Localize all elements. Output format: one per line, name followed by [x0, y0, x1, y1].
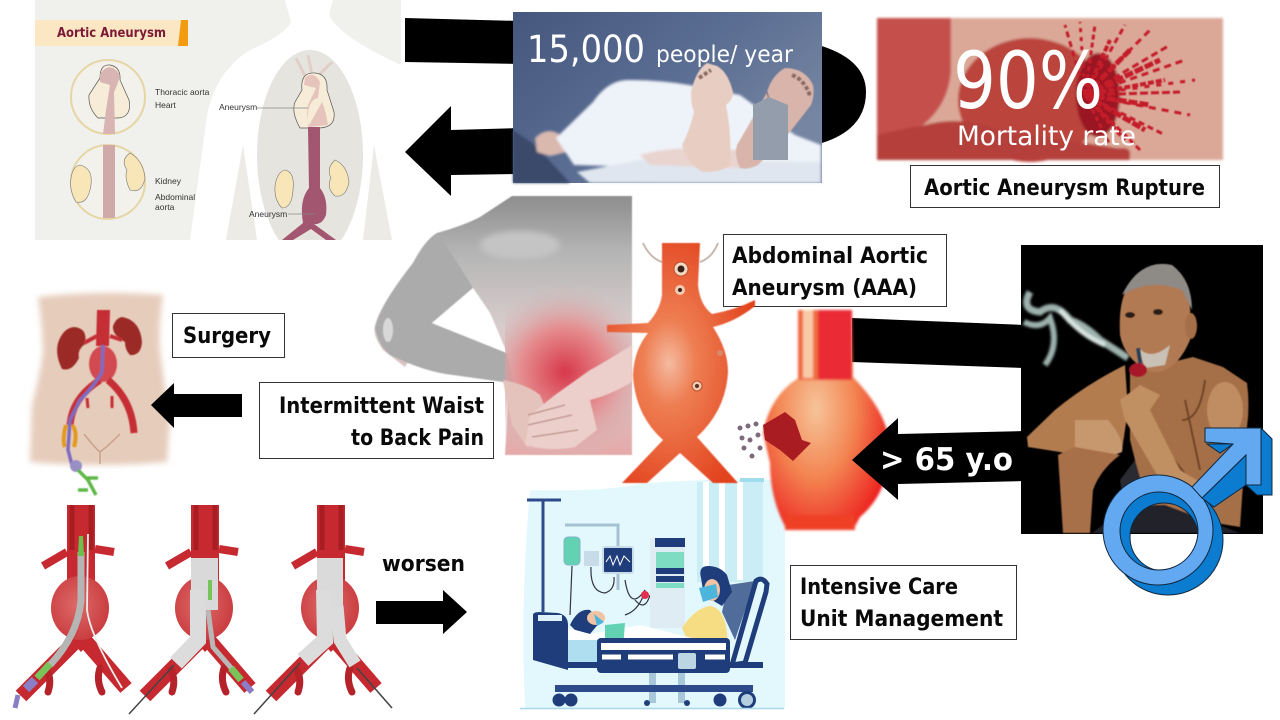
icon: monitor and drip [564, 525, 650, 615]
icon: thoracic aorta inset [71, 60, 210, 134]
icon: stent stage 1 [15, 505, 126, 708]
icon: hands on lower back [503, 345, 632, 449]
label: intermittent waist to back pain: Intermittent Waist [279, 394, 484, 419]
icon: torso aorta with aneurysm: Aneurysm [219, 102, 257, 112]
icon: stent stage 3 [254, 505, 392, 714]
label: aortic aneurysm rupture [910, 166, 1220, 208]
text: 90%: 90% [953, 37, 1103, 127]
arrow: age over 65 [852, 418, 1025, 500]
label: intensive care unit management: Intensive Care [800, 575, 958, 600]
icon: torso aorta with aneurysm [219, 55, 349, 240]
icon: kidneys [57, 317, 142, 370]
label: abdominal aortic aneurysm [724, 234, 946, 306]
text: 15,000 people per year [527, 28, 794, 71]
panel: 15,000 people per year photo [513, 12, 822, 183]
icon: male symbol [1103, 428, 1272, 595]
icon: feet [682, 63, 814, 172]
icon: abdominal aorta inset: Abdominal [155, 192, 195, 202]
icon: hospital bed [520, 579, 784, 708]
icon: stent stage 2 [129, 505, 252, 714]
panel: aortic aneurysm anatomy [35, 0, 402, 270]
icon: smoke [1024, 292, 1128, 365]
image: man with lower back pain [374, 196, 632, 455]
icon: blood particles [738, 422, 762, 458]
label: intermittent waist to back pain: to Back Pain [351, 426, 484, 451]
icon: thoracic aorta inset: Heart [155, 100, 176, 110]
icon: man body [1027, 264, 1248, 533]
text: 15,000 people per year: 15,000 [527, 28, 645, 71]
image: intensive care unit [520, 478, 785, 708]
label: aortic aneurysm rupture: Aortic Aneurysm Rupture [924, 176, 1205, 201]
icon: aorta with catheter [64, 310, 134, 495]
label: abdominal aortic aneurysm: Aneurysm (AAA) [732, 276, 917, 301]
text: over 65 years old: > 65 y.o [880, 442, 1013, 478]
icon: abdominal aorta inset: Kidney [155, 176, 182, 186]
label: intermittent waist to back pain [260, 382, 494, 458]
label: surgery: Surgery [183, 324, 271, 349]
arrow: smoker to AAA [852, 318, 1025, 368]
icon: nurse [682, 566, 732, 650]
label: surgery [172, 314, 284, 358]
image: abdomen with endovascular access [30, 293, 170, 495]
image: intact abdominal aortic aneurysm [607, 243, 755, 483]
icon: abdominal aorta inset [71, 145, 195, 219]
label: abdominal aortic aneurysm: Abdominal Aortic [732, 244, 928, 269]
arrow: worsen to ICU [376, 590, 467, 634]
icon: IV pole [527, 500, 561, 612]
panel: 90% mortality photo [877, 18, 1223, 162]
text: 15,000 people per year: people/ year [656, 42, 794, 68]
label: intensive care unit management: Unit Management [800, 607, 1003, 632]
text: worsen: worsen [382, 552, 465, 577]
icon: rupture site [763, 412, 811, 461]
arrow: curved black band behind death photo [405, 18, 866, 145]
image: elderly man smoking pipe [1021, 245, 1263, 534]
icon: torso aorta with aneurysm: Aneurysm [249, 209, 287, 219]
icon: thoracic aorta inset: Thoracic aorta [155, 87, 210, 97]
icon: toe tag [753, 97, 788, 160]
text: mortality rate: Mortality rate [957, 121, 1136, 152]
heading: aortic aneurysm banner: Aortic Aneurysm [57, 26, 166, 41]
icon: patient [568, 610, 730, 668]
image: ruptured aneurysm [738, 310, 889, 530]
heading: aortic aneurysm banner [35, 20, 188, 46]
icon: blood spatter [1065, 22, 1195, 150]
arrow: pain to surgery [151, 383, 242, 428]
label: intensive care unit management [790, 566, 1016, 640]
arrow: left to anatomy panel [405, 106, 520, 196]
icon: abdominal aorta inset: aorta [155, 202, 175, 212]
icon: ventilator [650, 538, 685, 628]
